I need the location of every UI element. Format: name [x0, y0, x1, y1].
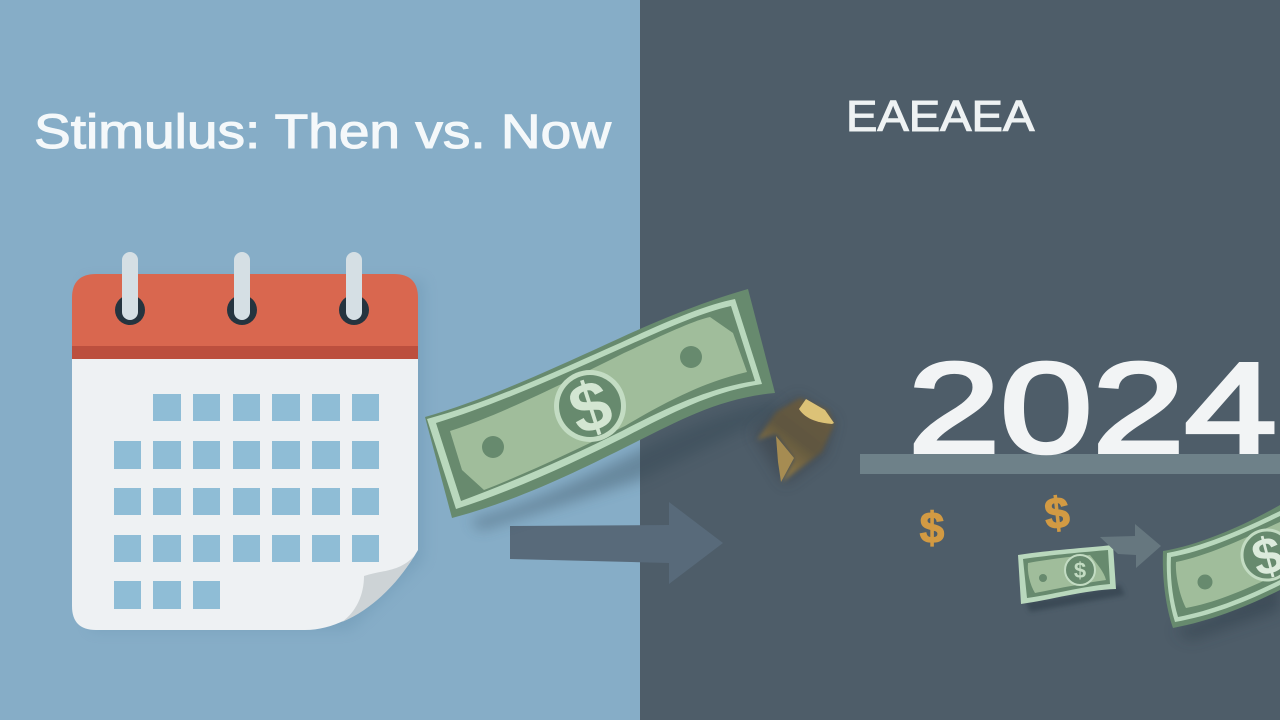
icon: calendar — [72, 252, 424, 630]
icon: small gold dollar left: $ — [920, 504, 944, 553]
icon: gold coin fragment — [752, 396, 835, 485]
bill light centre — [450, 317, 747, 490]
arrow: then to now — [510, 502, 723, 584]
bill dark inner — [436, 306, 755, 501]
calendar page — [72, 355, 418, 630]
calendar header dark band — [72, 346, 418, 359]
bill dollar sign: $ — [560, 364, 621, 450]
heading: right panel placeholder: EAEAEA — [846, 91, 1035, 141]
arrow: small arrow to larger bill — [1100, 524, 1161, 568]
bill seal — [554, 370, 626, 442]
title: Stimulus Then vs. Now: Stimulus: Then vs. Now — [34, 104, 612, 158]
icon: partial dollar bill right edge — [1163, 505, 1280, 640]
panel: right dark background — [640, 0, 1280, 720]
calendar page curl — [342, 556, 414, 622]
panel: left blue background — [0, 0, 640, 720]
bill left spot — [482, 436, 504, 458]
timeline bar — [860, 454, 1280, 474]
bill body — [425, 289, 775, 518]
calendar binder rings — [122, 252, 362, 320]
bill right spot — [680, 346, 702, 368]
icon: small dollar bill: $ — [1074, 558, 1086, 583]
icon: small dollar bill — [1018, 545, 1125, 612]
calendar day grid — [114, 394, 379, 609]
icon: large dollar bill — [425, 289, 780, 530]
bill light border — [427, 299, 762, 509]
year label: 2024: 2024 — [908, 337, 1277, 480]
calendar binder holes — [115, 295, 369, 325]
calendar red header — [72, 274, 418, 359]
icon: small gold dollar right: $ — [1042, 488, 1072, 539]
